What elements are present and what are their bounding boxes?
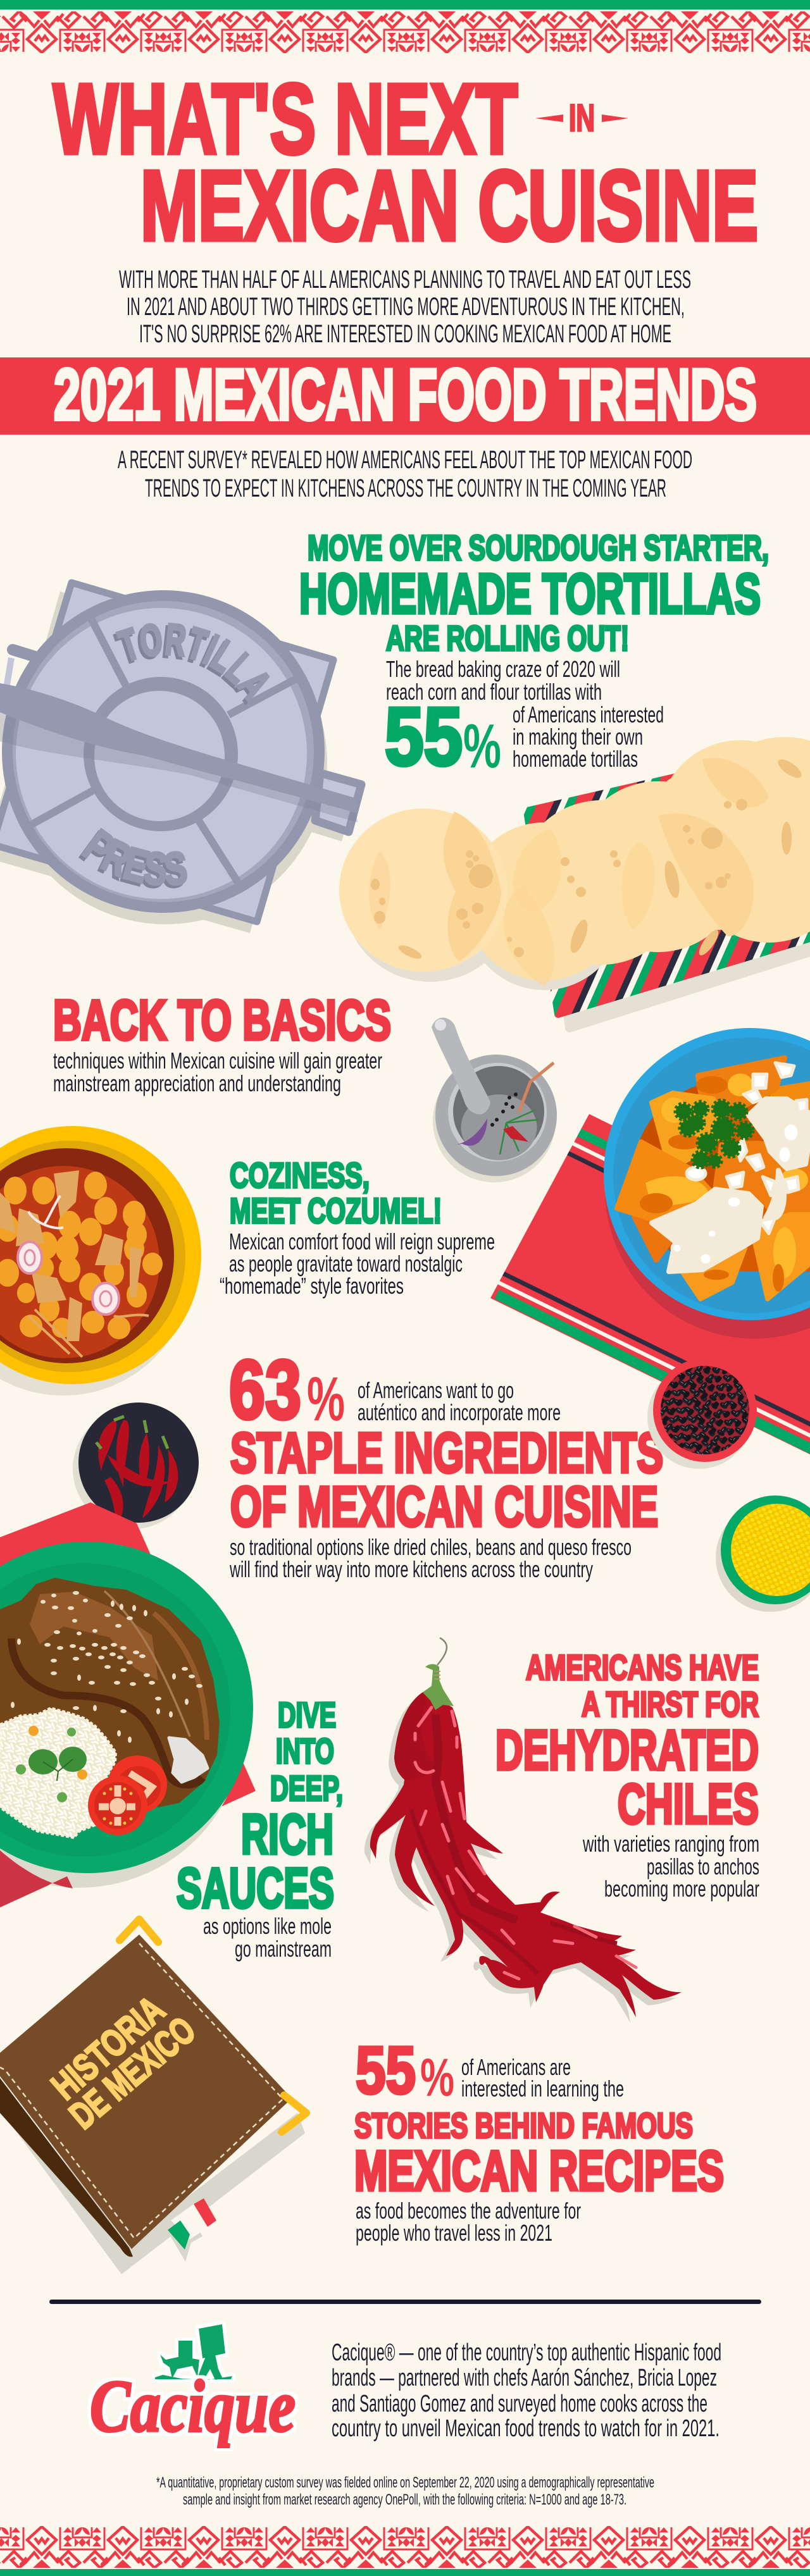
stat: 63 percent: % [307, 1364, 345, 1434]
tomato slices [88, 1756, 167, 1835]
sauces text: as options like mole [203, 1913, 332, 1939]
back to basics text: mainstream appreciation and understanding [53, 1070, 341, 1096]
tortilla body text: The bread baking craze of 2020 will [386, 656, 620, 682]
logo figure: donkey and traveller [155, 2324, 232, 2380]
stat: 63 percent: 63 [229, 1343, 301, 1436]
tortilla body text: homemade tortillas [513, 746, 638, 772]
crema [652, 1099, 810, 1272]
logo wordmark: Cacique [90, 2365, 296, 2448]
staple ingredients text: will find their way into more kitchens across the country [229, 1556, 593, 1582]
recipes text: people who travel less in 2021 [356, 2220, 552, 2246]
sauces text: DEEP, [270, 1768, 343, 1808]
about cacique paragraph [332, 2339, 721, 2442]
cacique logo [90, 2324, 296, 2448]
tortilla heading: ARE ROLLING OUT! [386, 618, 629, 658]
queso fresco [672, 1063, 807, 1265]
recipes text: as food becomes the adventure for [356, 2198, 581, 2224]
tortilla heading [299, 528, 769, 658]
staple ingredients text: auténtico and incorporate more [358, 1399, 561, 1425]
illustration: mortar and pestle [432, 1018, 557, 1182]
cozumel text: MEET COZUMEL! [230, 1191, 442, 1230]
stat: 55 percent: 55 [385, 690, 463, 783]
staple ingredients text: of Americans want to go [358, 1377, 514, 1403]
illustration: corn bowl [716, 1495, 810, 1612]
press lettering: TORTILLA [113, 625, 260, 705]
cozumel text: Mexican comfort food will reign supreme [229, 1229, 495, 1254]
chile stem [423, 1664, 454, 1710]
intro paragraph [119, 266, 691, 348]
illustration: chilaquiles plate [604, 1028, 810, 1320]
sauces text: INTO [276, 1731, 334, 1771]
illustration: mole plate [0, 1502, 256, 1907]
sauces text: DIVE [278, 1695, 336, 1735]
title line 1: WHAT'S NEXT [53, 64, 518, 175]
gold corners [120, 1919, 158, 1942]
sauces text: RICH [241, 1802, 333, 1866]
tortilla body text: in making their own [513, 724, 643, 750]
press lettering: TORTILLA [115, 622, 270, 702]
tortilla chips [617, 1058, 810, 1299]
illustration: tortilla press [0, 579, 366, 933]
rice with cilantro [0, 1708, 116, 1838]
dehydrated chiles text [495, 1647, 759, 1902]
cozumel text [220, 1155, 495, 1299]
book title [44, 1988, 203, 2137]
back to basics text [53, 988, 391, 1096]
press lettering: PRESS [81, 827, 187, 886]
recipes text: interested in learning the [461, 2076, 624, 2102]
stat: 55 percent: % [420, 2048, 454, 2107]
sauces text [177, 1695, 343, 1962]
stat: 55 percent: % [463, 711, 501, 781]
bookmark [168, 2198, 216, 2262]
cozumel text: as people gravitate toward nostalgic [229, 1251, 463, 1277]
illustration: dried chile bowl [73, 1403, 199, 1529]
sesame seeds [11, 1591, 202, 1743]
title [53, 64, 758, 261]
recipes text: of Americans are [461, 2054, 571, 2080]
top border: green bar and woven pattern [0, 0, 810, 53]
footnote [156, 2474, 654, 2508]
cozumel text: COZINESS, [230, 1155, 370, 1195]
book title: DE MEXICO [61, 2009, 203, 2137]
press handle [0, 683, 358, 822]
in connector with arrows [535, 97, 628, 139]
illustration: dried chiles [364, 1638, 682, 2023]
survey intro [118, 446, 692, 502]
sauces text: SAUCES [177, 1856, 334, 1919]
illustration: red striped place mat [490, 1114, 810, 1454]
back to basics text: BACK TO BASICS [53, 988, 391, 1051]
book title: HISTORIA [44, 1988, 173, 2108]
back to basics text: techniques within Mexican cuisine will gain greater [53, 1048, 382, 1074]
bottom border: woven pattern and green bar [0, 2526, 810, 2576]
recipes text [354, 2033, 724, 2246]
onions [18, 1196, 119, 1315]
stat: 55 percent: 55 [356, 2033, 416, 2108]
press lettering [78, 622, 270, 888]
recipes text: STORIES BEHIND FAMOUS [354, 2105, 693, 2145]
in connector with arrows: IN [569, 97, 595, 139]
hominy [0, 1172, 163, 1339]
illustration: pozole bowl [0, 1126, 201, 1396]
sauces text: go mainstream [235, 1936, 332, 1962]
illustration: tortillas on striped cloth [339, 737, 810, 1028]
cilantro sprig [676, 1101, 752, 1167]
drumstick bone [169, 1738, 208, 1782]
illustration: black bean bowl [647, 1358, 757, 1469]
squash pieces [0, 1170, 142, 1341]
tortilla body text: of Americans interested [513, 702, 664, 728]
staple ingredients text [229, 1343, 663, 1582]
tortilla body text [385, 656, 664, 783]
illustration: history book [0, 1919, 306, 2274]
tortilla body text: reach corn and flour tortillas with [386, 679, 602, 705]
mole sauce and chicken [0, 1578, 220, 1807]
cozumel text: “homemade” style favorites [220, 1273, 404, 1299]
press lettering: PRESS [78, 830, 184, 888]
